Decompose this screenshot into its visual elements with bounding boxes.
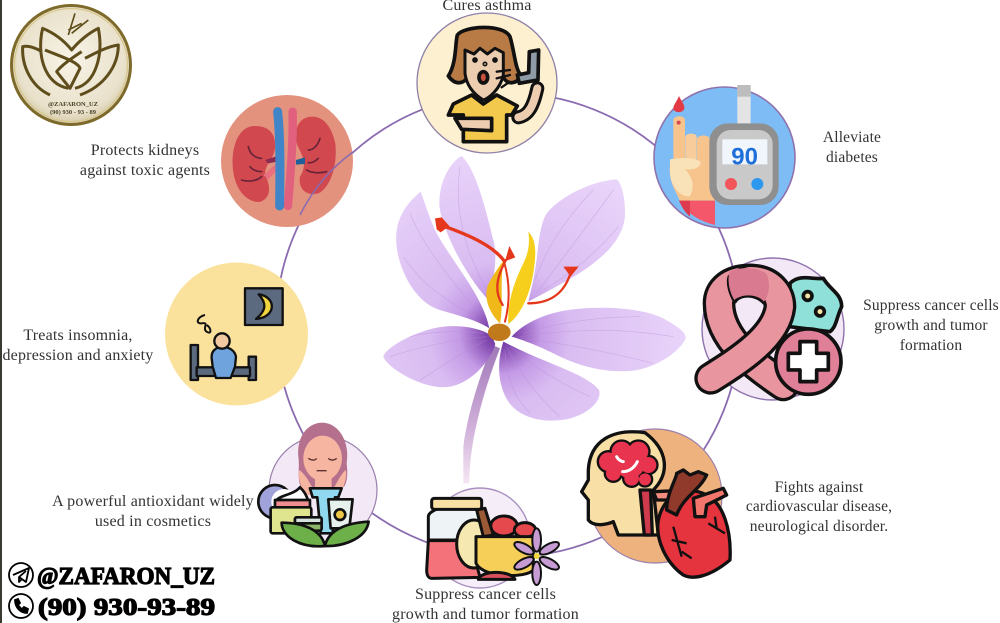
label: cardiovascular: neurological disorder.	[750, 518, 888, 535]
petals	[383, 156, 686, 421]
stem	[463, 345, 500, 483]
connecting ring	[276, 93, 740, 557]
label: protects kidneys: against toxic agents	[80, 162, 210, 179]
label: suppress cancer cells right: growth and tumor	[874, 317, 988, 334]
ring passing over kidney	[300, 152, 353, 215]
node: diabetes	[654, 85, 795, 228]
icon: woman, cosmetics and leaves	[258, 423, 369, 546]
label: protects kidneys: Protects kidneys	[91, 142, 199, 159]
label: insomnia: depression and anxiety	[2, 347, 154, 364]
node: cancer ribbon	[702, 258, 844, 400]
handle text: @ZAFARON_UZ	[37, 564, 215, 590]
flower	[383, 156, 686, 483]
icon: girl with inhaler	[448, 27, 539, 142]
label: antioxidant: used in cosmetics	[95, 513, 211, 530]
petal veins	[390, 167, 673, 417]
label: protects kidneys	[80, 142, 210, 179]
icon: moon and person on bed	[191, 288, 283, 380]
label: insomnia: Treats insomnia,	[23, 327, 133, 344]
label: insomnia	[2, 327, 154, 364]
label: suppress cancer cells right: Suppress cancer cells	[863, 297, 999, 314]
watermark contacts	[9, 563, 215, 621]
label: suppress cancer cells bottom: Suppress cancer cells	[415, 586, 556, 603]
icon: telegram	[9, 563, 33, 587]
icon: head, brain and heart	[582, 432, 730, 577]
label: suppress cancer cells right: formation	[900, 337, 962, 354]
label: cardiovascular: cardiovascular disease,	[746, 498, 892, 515]
phone number text: (90) 930-93-89	[38, 595, 215, 621]
icon: glucose meter and finger	[670, 85, 779, 225]
label: alleviate diabetes: Alleviate	[823, 129, 881, 146]
label: alleviate diabetes: diabetes	[826, 149, 878, 166]
node: insomnia	[165, 262, 308, 406]
icon: kidneys	[233, 112, 336, 206]
yellow stamens	[486, 260, 504, 323]
node: kidneys	[221, 95, 353, 227]
logo caption: @ZAFARON_UZ	[48, 101, 98, 108]
label: alleviate diabetes	[823, 129, 881, 166]
label: suppress cancer cells bottom	[392, 586, 579, 623]
logo lotus mark	[23, 13, 118, 95]
node: mortar and jar	[427, 488, 561, 588]
label: suppress cancer cells bottom: growth and tumor formation	[392, 606, 579, 623]
red stigmas	[443, 226, 571, 322]
icon: jar, mortar and saffron flower	[427, 498, 561, 585]
label: cardiovascular: Fights against	[775, 479, 864, 496]
label: cardiovascular	[746, 479, 892, 535]
icon: phone	[9, 594, 33, 618]
icon: glucose meter and finger: 90	[731, 144, 758, 171]
icon: ribbon, cell and plus	[711, 268, 842, 394]
flower centre	[488, 324, 511, 341]
logo badge	[12, 6, 130, 124]
node: asthma	[417, 13, 557, 153]
node: heart and brain	[582, 429, 730, 577]
logo badge: (90) 930 - 93 - 89	[50, 109, 97, 116]
label: antioxidant	[52, 493, 254, 530]
node: cosmetics	[258, 423, 377, 546]
label: suppress cancer cells right	[863, 297, 999, 354]
label: antioxidant: A powerful antioxidant widely	[52, 493, 254, 510]
